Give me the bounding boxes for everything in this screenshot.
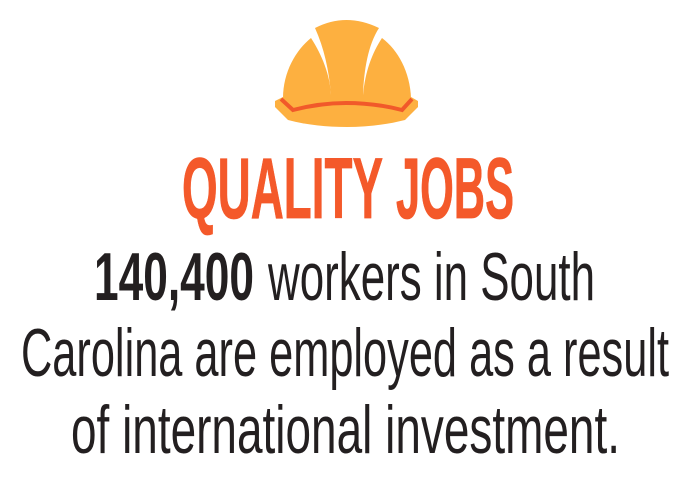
- text line: statistic: [94, 239, 595, 315]
- title: QUALITY: [182, 141, 383, 237]
- title: JOBS: [396, 141, 514, 237]
- text block: description: [21, 239, 669, 468]
- icon: hard hat: [275, 20, 418, 127]
- text line: statistic: 140,400: [94, 239, 254, 315]
